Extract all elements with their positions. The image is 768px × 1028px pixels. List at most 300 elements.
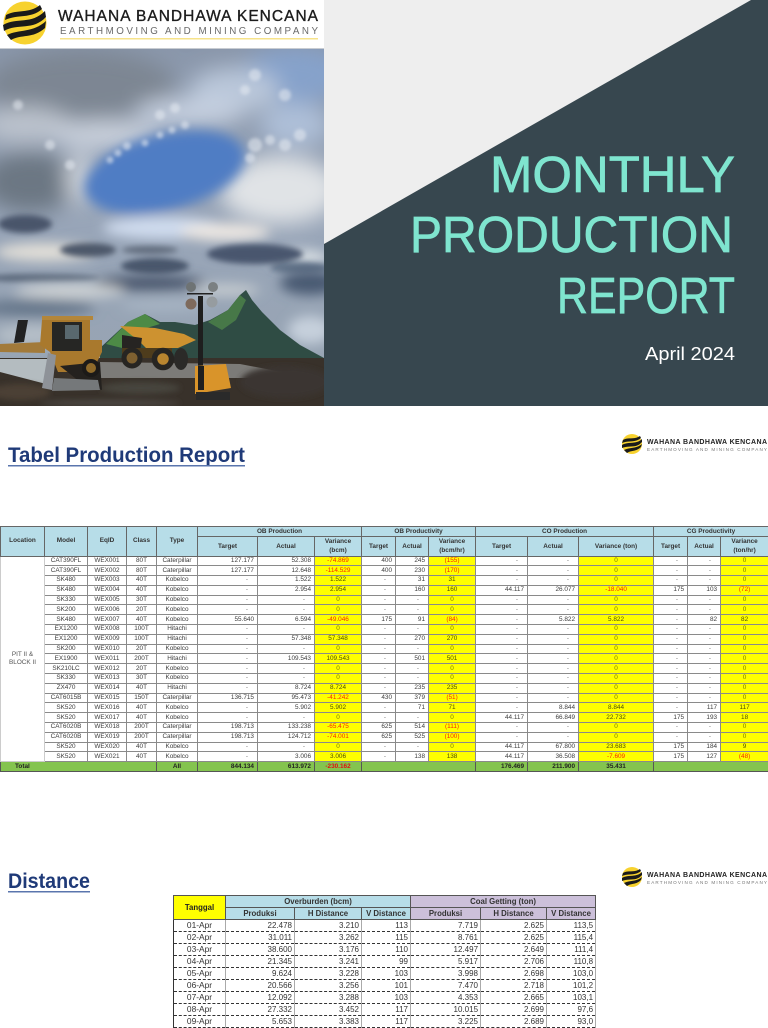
table: production report: Hitachi — [167, 684, 187, 691]
table: production report: WEX016 — [94, 704, 120, 711]
table: production report: Actual — [276, 543, 296, 550]
logo: top right of distance section — [622, 867, 767, 887]
table: distance: 101 — [395, 981, 408, 990]
table: production report: 0 — [336, 665, 340, 672]
table: production report: - — [676, 576, 678, 583]
table: production report: - — [384, 625, 386, 632]
table: distance: Produksi — [243, 909, 277, 918]
heading: tabel production report: Tabel Production Report — [8, 444, 245, 467]
table: production report: OB Production — [257, 528, 302, 534]
table: distance: 2.649 — [524, 945, 544, 954]
table: production report: Kobelco — [165, 743, 189, 750]
table: production report: (72) — [739, 586, 750, 593]
table: production report: EqID — [100, 537, 114, 544]
table: distance: 2.665 — [524, 993, 544, 1002]
table: production report: - — [709, 625, 711, 632]
table: production report: Caterpillar — [162, 694, 192, 701]
table: production report: SK520 — [56, 753, 76, 760]
table: production report: OB Productivity — [394, 528, 443, 534]
table: distance: 06-Apr — [187, 980, 212, 990]
table: distance: 3.383 — [339, 1017, 359, 1026]
table: production report: - — [567, 576, 569, 583]
table: production report: -74.869 — [327, 557, 349, 564]
table: production report: WEX009 — [94, 635, 120, 642]
table: production report: -74.001 — [327, 733, 349, 740]
mottled cloud texture — [13, 69, 306, 170]
table: production report: Kobelco — [165, 596, 189, 603]
table: production report: - — [303, 596, 305, 603]
table: production report: 82 — [741, 616, 748, 623]
table: production report: - — [709, 723, 711, 730]
ground — [0, 358, 324, 406]
table: production report: - — [246, 704, 248, 711]
table: production report: WEX004 — [94, 586, 120, 593]
table: production report: 133.238 — [288, 723, 311, 730]
table: production report: 193 — [706, 714, 717, 721]
dozer — [0, 316, 102, 391]
table: production report: 0 — [614, 665, 618, 672]
logo: top right of table section — [622, 434, 767, 454]
table: production report: 0 — [614, 694, 618, 701]
table: production report: 66.849 — [556, 714, 575, 721]
table: production report: - — [567, 606, 569, 613]
table: production report: - — [384, 714, 386, 721]
table: production report: 270 — [447, 635, 457, 642]
table: distance: 27.332 — [268, 1005, 292, 1014]
table: production report: WEX017 — [94, 714, 120, 721]
table: production report: 0 — [614, 557, 618, 564]
table: production report: 71 — [418, 704, 425, 711]
table: production report: SK200 — [56, 606, 76, 613]
table: production report: 103 — [706, 586, 717, 593]
table: production report: - — [516, 733, 518, 740]
table: production report: 40T — [136, 704, 147, 711]
table: production report: 625 — [381, 733, 392, 740]
table: production report: Actual — [694, 543, 714, 550]
table: distance: 110 — [395, 945, 408, 954]
table: production report: 160 — [447, 586, 457, 593]
table: production report: 52.308 — [291, 557, 311, 564]
table: production report: 5.822 — [559, 616, 575, 623]
table: distance: 103 — [395, 969, 408, 978]
table: production report: 40T — [136, 714, 147, 721]
table: production report: - — [676, 616, 678, 623]
table: production report: 117 — [739, 704, 750, 711]
table: production report: 0 — [743, 655, 746, 662]
table: production report: WEX006 — [94, 606, 120, 613]
cover background: diagonal panel — [324, 0, 768, 406]
table: production report: 0 — [614, 674, 618, 681]
table: distance: V Distance — [366, 909, 406, 918]
table: production report: -230.162 — [325, 763, 351, 770]
table: production report: 40T — [136, 586, 147, 593]
table: distance: 5.653 — [272, 1017, 292, 1026]
table: distance: V Distance — [551, 909, 591, 918]
table: production report: 127.177 — [231, 567, 254, 574]
table: production report: 0 — [336, 645, 340, 652]
table: production report: All — [173, 763, 181, 770]
table: production report: SK480 — [56, 586, 76, 593]
table: production report: - — [516, 557, 518, 564]
table: production report: - — [709, 567, 711, 574]
table: production report: (111) — [445, 723, 459, 730]
table: production report: 235 — [414, 684, 425, 691]
table: production report: - — [516, 576, 518, 583]
table: production report: Caterpillar — [162, 567, 192, 574]
table: distance: 9.624 — [272, 969, 292, 978]
table: production report: 31 — [418, 576, 425, 583]
table: production report: - — [709, 645, 711, 652]
title: monthly production report: MONTHLY — [490, 146, 735, 203]
table: production report: - — [567, 655, 569, 662]
table: distance: 04-Apr — [187, 956, 212, 966]
table: production report: Target — [369, 543, 388, 550]
table: production report: - — [567, 645, 569, 652]
table: production report: Variance — [731, 538, 758, 545]
table: production report: - — [417, 645, 419, 652]
table: distance: 20.566 — [268, 981, 292, 990]
table: production report: 501 — [447, 655, 457, 662]
table: production report: - — [676, 684, 678, 691]
table: production report: 0 — [336, 743, 340, 750]
table: production report: (84) — [446, 616, 458, 623]
table: production report: Kobelco — [165, 665, 189, 672]
table: distance: 5.917 — [458, 957, 478, 966]
table: production report: BLOCK II — [9, 659, 36, 666]
table: production report: 613.972 — [288, 763, 311, 770]
table: production report: WEX018 — [94, 723, 120, 730]
table: production report: - — [384, 576, 386, 583]
table: distance: 7.470 — [458, 981, 478, 990]
table: production report: Variance (ton) — [595, 543, 637, 550]
table: production report: 5.902 — [295, 704, 311, 711]
table: production report: WEX010 — [94, 645, 120, 652]
table: production report: 30T — [136, 596, 147, 603]
table: production report: - — [709, 557, 711, 564]
table: production report: 35.431 — [606, 763, 626, 770]
table: distance: 01-Apr — [187, 920, 212, 930]
table: production report: - — [676, 625, 678, 632]
table: production report: Kobelco — [165, 586, 189, 593]
table: distance: Tanggal — [185, 903, 214, 912]
table: production report: 91 — [418, 616, 425, 623]
table: production report: 0 — [450, 606, 454, 613]
table: production report: - — [567, 694, 569, 701]
table: distance: 3.225 — [458, 1017, 478, 1026]
table: production report: - — [516, 684, 518, 691]
table: production report: WEX005 — [94, 596, 120, 603]
table: production report: - — [676, 704, 678, 711]
table: production report: - — [709, 655, 711, 662]
table: production report: -65.475 — [327, 723, 349, 730]
table: production report: - — [384, 596, 386, 603]
table: production report: 0 — [450, 596, 454, 603]
table: distance: 2.689 — [524, 1017, 544, 1026]
table: production report: 175 — [673, 586, 684, 593]
table: production report: - — [417, 714, 419, 721]
table: distance: 117 — [395, 1017, 408, 1026]
table: production report: - — [246, 743, 248, 750]
table: production report: 0 — [614, 645, 618, 652]
table: production report: CAT6015B — [51, 694, 81, 701]
table: production report: 0 — [336, 674, 340, 681]
table: distance: H Distance — [493, 909, 534, 918]
table: production report: - — [303, 674, 305, 681]
table: production report: WEX013 — [94, 674, 120, 681]
table: production report: -114.529 — [326, 567, 350, 574]
table: production report: Class — [133, 537, 150, 544]
table: production report: Total — [15, 763, 30, 770]
table: production report: 31 — [448, 576, 456, 583]
table: production report: SK520 — [56, 704, 76, 711]
table: production report: Kobelco — [165, 753, 189, 760]
table: production report: 0 — [743, 645, 746, 652]
table: production report: 12.648 — [291, 567, 311, 574]
table: production report: 160 — [414, 586, 425, 593]
table: production report: Kobelco — [165, 606, 189, 613]
table: production report: 0 — [743, 723, 746, 730]
table: distance: 3.262 — [339, 933, 359, 942]
table: production report: 0 — [743, 694, 746, 701]
table: distance: 103,0 — [573, 969, 593, 978]
table: production report: SK520 — [56, 743, 76, 750]
table: production report: - — [303, 645, 305, 652]
table: production report: 211.900 — [552, 763, 575, 770]
table: distance: 103,1 — [573, 993, 593, 1002]
table: production report: 2.954 — [295, 586, 311, 593]
table: production report: 109.543 — [326, 655, 350, 662]
table: production report: 40T — [136, 753, 147, 760]
table: distance: 12.092 — [268, 993, 292, 1002]
table: production report: - — [516, 635, 518, 642]
table: production report: 0 — [743, 674, 746, 681]
table: distance: 99 — [399, 957, 408, 966]
table: production report: -41.242 — [327, 694, 349, 701]
table: production report: - — [246, 753, 248, 760]
table: distance: 08-Apr — [187, 1004, 212, 1014]
table: production report: - — [384, 743, 386, 750]
table: production report: 0 — [614, 684, 618, 691]
table: distance — [173, 895, 596, 1028]
table: distance: 111,4 — [574, 945, 593, 954]
table: production report: - — [567, 567, 569, 574]
table: production report: WEX003 — [94, 576, 120, 583]
table: production report: - — [709, 665, 711, 672]
table: production report: - — [384, 674, 386, 681]
table: production report: 0 — [336, 714, 340, 721]
table: distance: 115 — [395, 933, 408, 942]
table: distance: 7.719 — [458, 921, 478, 930]
table: production report: Caterpillar — [162, 723, 192, 730]
table: production report: WEX014 — [94, 684, 120, 691]
table: production report: - — [516, 655, 518, 662]
table: production report: 0 — [614, 596, 618, 603]
table: distance: 4.353 — [458, 993, 478, 1002]
company name: EARTHMOVING AND MINING COMPANY — [60, 26, 318, 37]
table: distance: 3.288 — [339, 993, 359, 1002]
table: production report: - — [417, 625, 419, 632]
table: production report: 136.715 — [231, 694, 254, 701]
table: production report: 9 — [743, 743, 746, 750]
table: distance: 117 — [395, 1005, 408, 1014]
dump truck — [120, 326, 196, 370]
table: production report: Kobelco — [165, 674, 189, 681]
table: production report: WEX021 — [94, 753, 120, 760]
table: distance: 2.625 — [524, 921, 544, 930]
heading: distance: Distance — [8, 870, 90, 893]
table: production report: - — [516, 645, 518, 652]
table: production report: - — [246, 635, 248, 642]
table: distance: 03-Apr — [187, 944, 212, 954]
table: production report: Variance — [325, 538, 351, 545]
table: distance: 09-Apr — [187, 1016, 212, 1026]
table: production report: 40T — [136, 616, 147, 623]
table: production report: - — [246, 655, 248, 662]
logo: top right of distance section: EARTHMOVING AND MINING COMPANY — [647, 880, 767, 885]
table: production report: 525 — [414, 733, 425, 740]
table: production report: 400 — [381, 557, 392, 564]
table: production report: - — [246, 714, 248, 721]
table: production report: Target — [218, 543, 237, 550]
table: production report: 71 — [448, 704, 456, 711]
table: production report: Actual — [543, 543, 563, 550]
table: production report: - — [676, 665, 678, 672]
table: production report: Kobelco — [165, 645, 189, 652]
table: production report: - — [516, 596, 518, 603]
table: production report: - — [676, 674, 678, 681]
table: distance: 3.228 — [339, 969, 359, 978]
table: production report: 0 — [614, 567, 618, 574]
table: production report: 150T — [134, 694, 149, 701]
table: production report: 245 — [414, 557, 425, 564]
table: production report: SK330 — [56, 596, 76, 603]
table: production report: Type — [170, 537, 184, 544]
table: distance: 115,4 — [574, 933, 593, 942]
table: production report: 0 — [450, 743, 454, 750]
table: production report: 430 — [381, 694, 392, 701]
table: production report: - — [709, 684, 711, 691]
table: distance: 2.698 — [524, 969, 544, 978]
table: production report: - — [567, 733, 569, 740]
table: production report: - — [516, 674, 518, 681]
table: production report: - — [676, 723, 678, 730]
table: production report: - — [709, 733, 711, 740]
table: distance: 22.478 — [268, 921, 292, 930]
table: production report: - — [516, 616, 518, 623]
table: production report: 0 — [450, 645, 454, 652]
table: production report: - — [384, 645, 386, 652]
table: production report: 200T — [134, 733, 149, 740]
table: production report: Caterpillar — [162, 557, 192, 564]
table: production report: WEX015 — [94, 694, 120, 701]
table: production report: 18 — [741, 714, 748, 721]
table: production report: Kobelco — [165, 714, 189, 721]
table: production report: - — [303, 606, 305, 613]
table: production report: EX1200 — [55, 625, 77, 632]
table: distance: 93,0 — [577, 1017, 593, 1026]
title: monthly production report: REPORT — [557, 267, 735, 324]
table: production report: - — [384, 655, 386, 662]
table: distance: 101,2 — [573, 981, 593, 990]
table: production report: 0 — [614, 625, 618, 632]
table: production report: - — [246, 606, 248, 613]
table: production report: 5.822 — [608, 616, 624, 623]
table: production report: 44.117 — [505, 753, 524, 760]
table: production report: 198.713 — [231, 723, 254, 730]
table: production report: - — [709, 694, 711, 701]
table: production report: 6.594 — [295, 616, 311, 623]
logo: top right of table section: EARTHMOVING AND MINING COMPANY — [647, 447, 767, 452]
table: production report: 0 — [450, 714, 454, 721]
table: production report: CAT390FL — [51, 557, 81, 564]
table: production report: - — [709, 635, 711, 642]
table: production report: 0 — [743, 665, 746, 672]
table: production report: 175 — [673, 714, 684, 721]
table: production report: 0 — [614, 635, 618, 642]
table: distance: 3.176 — [339, 945, 359, 954]
logo: top right of table section: WAHANA BANDHAWA KENCANA — [647, 439, 767, 446]
table: production report: 379 — [414, 694, 425, 701]
table: distance: Produksi — [429, 909, 462, 918]
table: production report: - — [567, 596, 569, 603]
table: production report: 184 — [706, 743, 717, 750]
table: production report: CAT390FL — [51, 567, 81, 574]
table: production report: Hitachi — [167, 635, 187, 642]
table: production report: SK480 — [56, 576, 76, 583]
table: distance: 2.706 — [524, 957, 544, 966]
table: production report: 0 — [336, 625, 340, 632]
table: production report: Target — [661, 543, 680, 550]
table: production report: Variance — [439, 538, 465, 545]
table: production report: 138 — [447, 753, 457, 760]
lower sky — [0, 271, 340, 345]
table: production report: 8.724 — [330, 684, 346, 691]
table: production report: CAT6020B — [51, 733, 81, 740]
table: production report: SK480 — [56, 616, 76, 623]
table: production report: 0 — [614, 606, 618, 613]
table: distance: Overburden (bcm) — [284, 897, 352, 906]
table: production report: 117 — [707, 704, 717, 711]
table: distance: 113 — [395, 921, 408, 930]
table: production report: Target — [492, 543, 511, 550]
table: production report: 3.006 — [295, 753, 311, 760]
table: production report: WEX002 — [94, 567, 120, 574]
table: distance: 3.452 — [339, 1005, 359, 1014]
table: distance: 10.015 — [454, 1005, 478, 1014]
table: production report: - — [246, 645, 248, 652]
table: production report: 198.713 — [231, 733, 254, 740]
table: production report: - — [303, 743, 305, 750]
table: production report: 200T — [134, 723, 149, 730]
table: production report: - — [246, 576, 248, 583]
table: production report: - — [384, 635, 386, 642]
table: production report: 175 — [673, 743, 684, 750]
table: production report: Kobelco — [165, 616, 189, 623]
table: production report: 0 — [336, 596, 340, 603]
table: production report: 0 — [743, 567, 746, 574]
table: production report: - — [709, 606, 711, 613]
table: production report: 3.006 — [330, 753, 346, 760]
table: distance: 2.718 — [524, 981, 544, 990]
table: production report: - — [516, 704, 518, 711]
table: production report: (100) — [445, 733, 459, 740]
table: production report: WEX001 — [94, 557, 120, 564]
table: production report: SK520 — [56, 714, 76, 721]
table: production report: - — [567, 684, 569, 691]
table: production report: Kobelco — [165, 576, 189, 583]
light tower — [186, 282, 231, 400]
table: production report: 0 — [450, 625, 454, 632]
